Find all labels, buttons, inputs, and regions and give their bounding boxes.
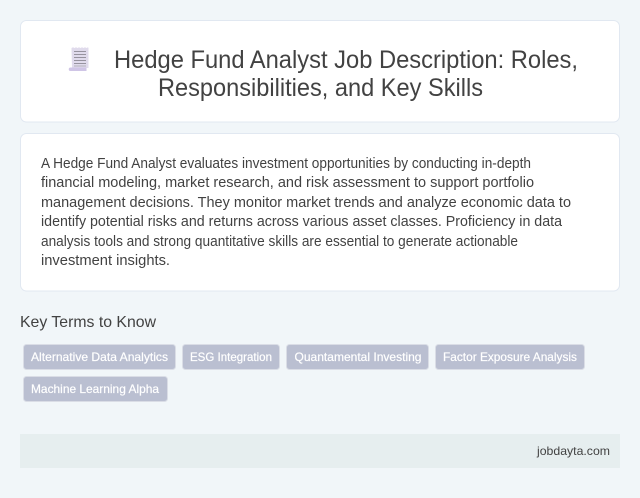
tag list — [24, 344, 584, 402]
tag: esg integration — [182, 344, 280, 370]
icon: document scroll — [69, 47, 88, 71]
footer bar — [20, 434, 620, 468]
tag: esg integration: ESG Integration — [190, 350, 272, 364]
tag: machine learning alpha — [24, 376, 168, 402]
text block: description: identify potential risks and returns across various asset classes. Proficiency in data — [41, 214, 562, 230]
panel: title card — [20, 20, 620, 122]
panel: description card — [20, 134, 620, 291]
tag: quantamental investing — [286, 344, 428, 370]
tag: quantamental investing: Quantamental Investing — [294, 350, 422, 364]
heading: title: Hedge Fund Analyst Job Description: Roles, — [114, 46, 578, 74]
text block: description: management decisions. They monitor market trends and analyze economic data to — [41, 195, 571, 211]
heading: key terms: Key Terms to Know — [20, 314, 156, 331]
tag: machine learning alpha: Machine Learning Alpha — [31, 382, 159, 396]
text block: description: financial modeling, market research, and risk assessment to support portfolio — [41, 175, 534, 191]
tag: factor exposure analysis: Factor Exposure Analysis — [443, 350, 577, 364]
heading: title: Responsibilities, and Key Skills — [158, 74, 483, 102]
tag: factor exposure analysis — [436, 344, 584, 370]
footer text: source: jobdayta.com — [536, 444, 610, 458]
tag: alternative data analytics — [24, 344, 176, 370]
tag: alternative data analytics: Alternative Data Analytics — [31, 350, 168, 364]
heading: title — [114, 46, 578, 102]
text block: description: analysis tools and strong quantitative skills are essential to generate actionable — [41, 234, 518, 250]
text block: description — [41, 156, 571, 269]
text block: description: A Hedge Fund Analyst evaluates investment opportunities by conducting in-depth — [41, 156, 531, 172]
text block: description: investment insights. — [41, 253, 170, 269]
